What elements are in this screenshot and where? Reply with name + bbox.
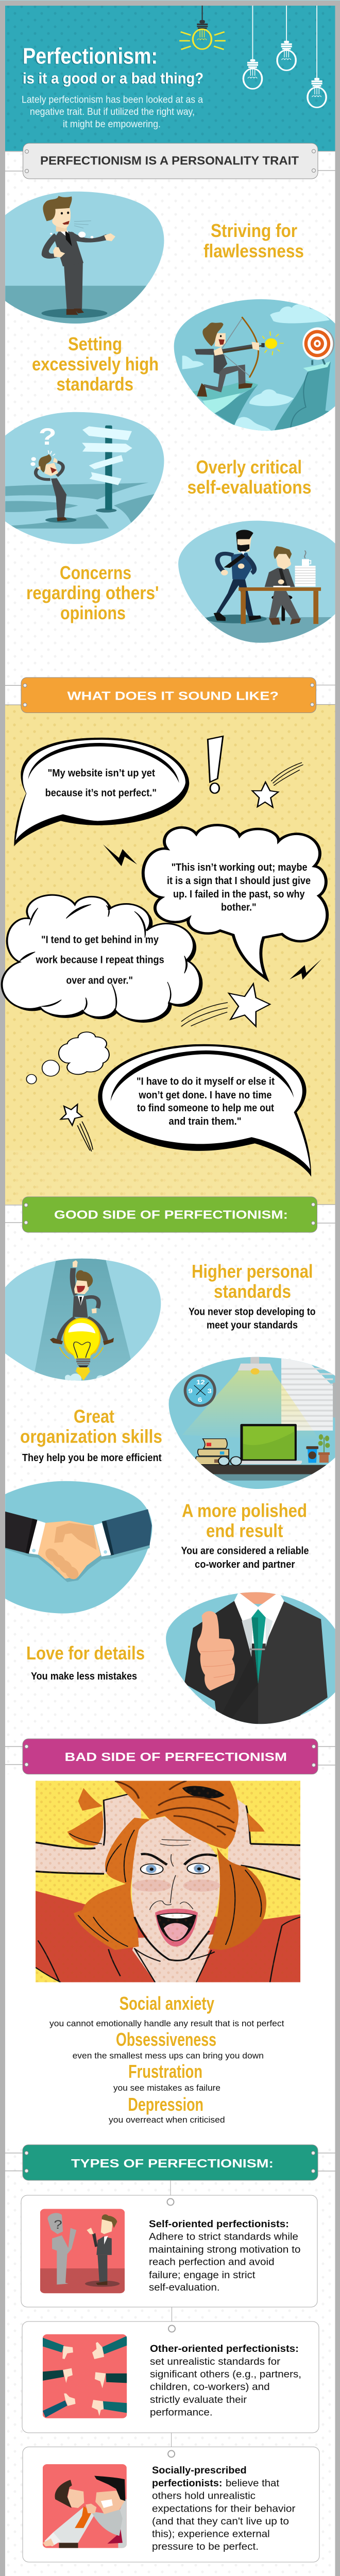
heading: types of perfectionism	[5, 2145, 335, 2180]
panel: signpost illustration: ?	[39, 423, 57, 450]
callout: cloud bubble i tend to get behind: "I tend to get behind in my	[41, 935, 159, 946]
heading: great organization skills: organization skills	[20, 1426, 162, 1447]
icon: thumb up fist	[197, 1611, 235, 1690]
heading: perfectionism is a personality trait: PERFECTIONISM IS A PERSONALITY TRAIT	[40, 154, 299, 167]
heading: overly critical self-evaluations: Overly critical	[196, 456, 302, 478]
text: other-oriented description: performance.	[150, 2407, 213, 2418]
heading: higher personal standards: You never stop developing to	[189, 1307, 316, 1318]
icon: lightning one	[103, 844, 137, 866]
heading: overly critical self-evaluations	[188, 456, 311, 498]
heading: what does it sound like	[5, 677, 335, 713]
panel: header	[5, 6, 335, 151]
icon: thought puffs	[26, 1032, 109, 1084]
heading: setting excessively high standards: standards	[57, 374, 133, 395]
panel: striving for flawlessness illustration	[5, 192, 168, 326]
text: socially-prescribed description: this); experience external	[152, 2529, 270, 2540]
icon: wall clock: 6	[198, 1396, 202, 1403]
text block: frustration: Frustration	[128, 2061, 202, 2082]
text: self-oriented description: failure; engage in strict	[149, 2270, 256, 2281]
panel: man riding light bulb illustration	[5, 1258, 161, 1383]
text block: depression: Depression	[128, 2094, 203, 2115]
panel: archer illustration	[174, 299, 335, 432]
heading: overly critical self-evaluations: self-evaluations	[188, 477, 311, 498]
text: socially-prescribed description: pressure to be perfect.	[152, 2541, 259, 2552]
heading: bad side of perfectionism	[5, 1739, 335, 1774]
text: other-oriented description: significant others (e.g., partners,	[150, 2369, 301, 2380]
subtitle: is it a good or a bad thing?	[22, 71, 202, 88]
text block: social anxiety: Social anxiety	[120, 1993, 214, 2014]
text: other-oriented description: children, co-workers) and	[150, 2382, 270, 2393]
callout: cloud bubble i tend to get behind	[2, 895, 202, 1023]
callout: cloud bubble this isn't working out	[143, 825, 327, 978]
intro text: negative trait. But if utilized the right way,	[30, 107, 195, 117]
heading: great organization skills	[20, 1405, 162, 1464]
text block: obsessiveness: even the smallest mess ups can bring you down	[73, 2052, 264, 2061]
text: self-oriented description: Self-oriented perfectionists:	[149, 2219, 289, 2230]
illustration: man with shadow self: ?	[54, 2218, 62, 2232]
intro text: Lately perfectionism has been looked at as a	[22, 95, 203, 105]
text: self-oriented description	[149, 2219, 301, 2293]
icon: wall clock: 12	[196, 1379, 205, 1386]
text: socially-prescribed description: expectations for their behavior	[152, 2504, 296, 2514]
text block: social anxiety: you cannot emotionally handle any result that is not perfect	[49, 2019, 284, 2028]
panel: thumbs up businessman illustration	[166, 1591, 335, 1725]
heading: striving for flawlessness: flawlessness	[203, 240, 304, 262]
callout: speech bubble i have to do it myself: to find someone to help me out	[137, 1103, 274, 1114]
heading: higher personal standards: meet your standards	[207, 1320, 298, 1331]
subtitle: is it a good or a bad thing?	[23, 70, 203, 87]
text: self-oriented description: maintaining strong motivation to	[149, 2244, 301, 2256]
heading: types of perfectionism: TYPES OF PERFECTIONISM:	[71, 2157, 274, 2170]
callout: speech bubble i have to do it myself	[98, 1044, 311, 1177]
text: other-oriented description: Other-oriented perfectionists:	[150, 2344, 299, 2354]
panel: signpost illustration	[5, 412, 164, 544]
heading: setting excessively high standards: Setting	[68, 333, 122, 354]
callout: cloud bubble i tend to get behind: over and over."	[66, 975, 133, 986]
icon: hanging white bulbs	[243, 6, 326, 108]
intro text: it might be empowering.	[63, 119, 161, 130]
heading: concerns regarding others' opinions	[26, 562, 159, 623]
illustration: frustrated woman pulling hair	[36, 1781, 300, 1982]
callout: speech bubble my website	[14, 738, 189, 846]
heading: love for details: You make less mistakes	[31, 1671, 137, 1682]
text block: depression: you overreact when criticised	[109, 2115, 225, 2125]
heading: concerns regarding others' opinions: regarding others'	[26, 582, 159, 603]
heading: a more polished end result: co-worker and partner	[195, 1559, 295, 1570]
intro text	[22, 95, 203, 130]
heading: good side of perfectionism: GOOD SIDE OF PERFECTIONISM:	[54, 1208, 288, 1222]
heading: love for details: Love for details	[26, 1642, 145, 1664]
text: other-oriented description: strictly evaluate their	[150, 2395, 247, 2405]
callout: cloud bubble this isn't working out: up. I failed in the past, so why	[173, 889, 305, 900]
icon: hanging yellow bulb	[179, 6, 226, 49]
heading: love for details	[26, 1642, 145, 1682]
heading: a more polished end result: A more polished	[182, 1500, 307, 1521]
text block: depression	[109, 2094, 225, 2125]
text block: social anxiety	[49, 1993, 284, 2028]
title: Perfectionism:	[23, 43, 158, 69]
text block: frustration: you see mistakes as failure	[113, 2083, 220, 2093]
heading: great organization skills: Great	[74, 1405, 114, 1427]
icon: exclamation mark	[208, 736, 223, 793]
text: self-oriented description: Adhere to strict standards while	[149, 2232, 298, 2242]
heading: setting excessively high standards: excessively high	[32, 353, 159, 375]
panel: other-oriented card	[22, 2307, 319, 2433]
panel: organized desk illustration	[169, 1357, 335, 1489]
callout: speech bubble i have to do it myself: won’t get done. I have no time	[138, 1090, 271, 1101]
icon: lightning two	[290, 959, 321, 980]
heading: striving for flawlessness	[203, 220, 304, 262]
text block: obsessiveness: Obsessiveness	[116, 2029, 216, 2050]
heading: concerns regarding others' opinions: Concerns	[60, 562, 131, 583]
callout: speech bubble i have to do it myself: "I have to do it myself or else it	[137, 1076, 275, 1087]
text block: frustration	[113, 2061, 220, 2093]
illustration: boss grabbing employee	[43, 2464, 127, 2548]
panel: self-oriented card	[21, 2180, 317, 2307]
icon: shooting star one	[252, 762, 303, 807]
icon: wall clock: 9	[188, 1387, 193, 1395]
heading: what does it sound like: WHAT DOES IT SOUND LIKE?	[67, 689, 279, 703]
text: socially-prescribed description: believe that	[226, 2478, 280, 2489]
text: self-oriented description: reach perfection and avoid	[149, 2257, 275, 2268]
callout: speech bubble my website: because it’s not perfect."	[45, 788, 157, 799]
title: Perfectionism:	[22, 44, 157, 69]
icon: wall clock	[184, 1374, 216, 1407]
text: socially-prescribed description	[152, 2465, 296, 2552]
heading: a more polished end result: You are considered a reliable	[181, 1546, 309, 1557]
heading: a more polished end result	[181, 1500, 309, 1570]
icon: wall clock: 3	[207, 1387, 212, 1395]
text: socially-prescribed description: (and that they can't live up to	[152, 2516, 289, 2527]
heading: higher personal standards: standards	[214, 1281, 291, 1302]
callout: cloud bubble this isn't working out: "This isn’t working out; maybe	[172, 862, 308, 873]
text: socially-prescribed description: Socially-prescribed	[152, 2465, 247, 2476]
callout: speech bubble my website: "My website isn’t up yet	[48, 768, 155, 779]
panel: office coworkers illustration	[174, 521, 338, 645]
icon: shooting star three	[61, 1105, 93, 1151]
callout: cloud bubble this isn't working out: it is a sign that I should just give	[167, 875, 311, 887]
callout: cloud bubble this isn't working out: bother."	[221, 902, 257, 913]
heading: striving for flawlessness: Striving for	[211, 220, 297, 241]
heading: higher personal standards	[189, 1261, 316, 1331]
callout: cloud bubble i tend to get behind: work because I repeat things	[36, 954, 164, 965]
text: other-oriented description: set unrealistic standards for	[150, 2357, 281, 2367]
heading: a more polished end result: end result	[206, 1520, 283, 1541]
heading: concerns regarding others' opinions: opinions	[60, 602, 126, 623]
text: self-oriented description: self-evaluation.	[149, 2282, 219, 2293]
illustration: thumbs up and down hands	[43, 2334, 127, 2418]
icon: shooting star two	[181, 984, 270, 1026]
heading: setting excessively high standards	[32, 333, 159, 395]
heading: good side of perfectionism	[5, 1197, 335, 1232]
heading: great organization skills: They help you be more efficient	[22, 1452, 162, 1464]
heading: higher personal standards: Higher personal	[192, 1261, 313, 1282]
panel: what does it sound like background	[5, 705, 335, 1205]
text: socially-prescribed description: others hold unrealistic	[152, 2490, 256, 2502]
text: socially-prescribed description: perfectionists:	[152, 2478, 223, 2489]
heading: perfectionism is a personality trait	[5, 143, 335, 179]
panel: socially-prescribed card	[23, 2433, 319, 2562]
text block: obsessiveness	[73, 2029, 264, 2061]
panel: handshake illustration	[5, 1481, 152, 1614]
heading: bad side of perfectionism: BAD SIDE OF PERFECTIONISM	[65, 1750, 287, 1764]
illustration: man with shadow self	[40, 2209, 125, 2293]
callout: speech bubble i have to do it myself: and train them."	[169, 1116, 241, 1127]
text: other-oriented description	[150, 2344, 301, 2418]
